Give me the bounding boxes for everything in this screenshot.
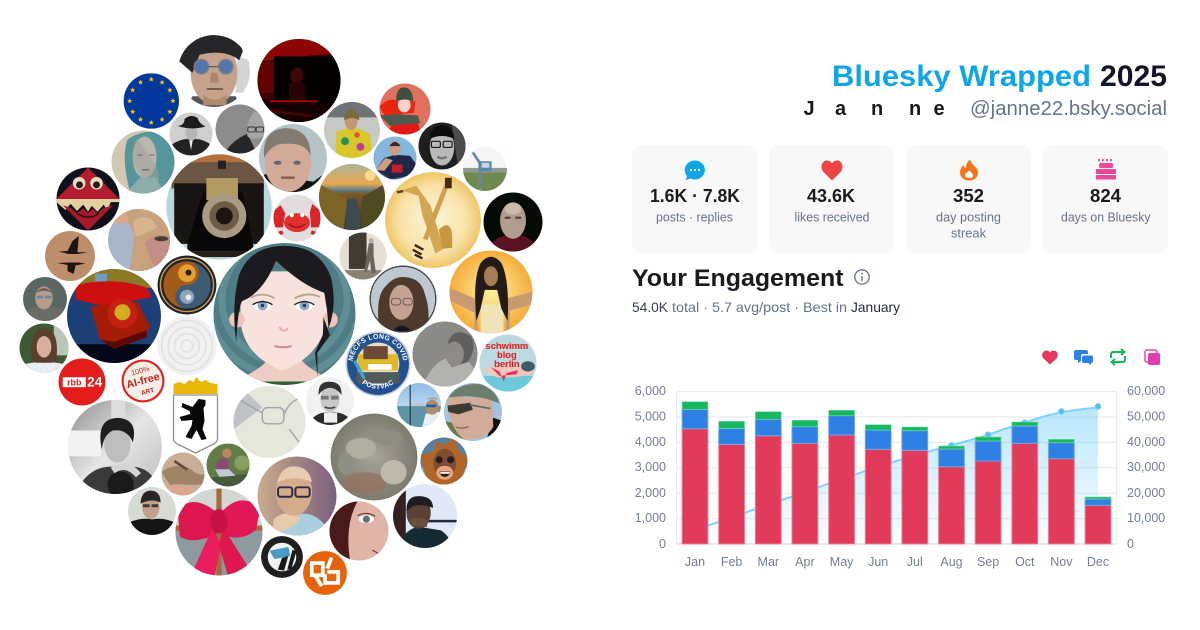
- avatar: Berlin coat of arms: [174, 377, 218, 453]
- avatar: older man with grey hair: [259, 124, 327, 192]
- avatar: bald man with glasses in pastel light: [258, 456, 336, 536]
- avatar: bald man in dark room: [484, 192, 542, 252]
- left axis labels: 5,000: [635, 410, 666, 424]
- avatar: man in blue shirt with folded hands: [374, 136, 416, 180]
- engagement summary: 54.0K: [632, 299, 669, 315]
- avatar: mailbox in landscape: [463, 147, 507, 191]
- icon: comment bubble: [685, 160, 705, 180]
- avatar: ME/CFS Long Covid Postvac badge: POSTVAC: [362, 380, 394, 389]
- avatar: man with glasses, black and white sketch: [306, 377, 354, 425]
- left axis labels: 0: [659, 537, 666, 551]
- stat card: likes received: 43.6K: [807, 186, 855, 206]
- icon: info: [855, 270, 869, 284]
- month labels: Feb: [721, 555, 742, 569]
- avatar: woman with brown hair: [20, 324, 68, 372]
- stat card: days on Bluesky: days on Bluesky: [1061, 210, 1151, 224]
- stat card: posts and replies: [632, 145, 757, 253]
- avatar: schwimm blog berlin: berlin: [494, 358, 520, 369]
- icon: legend reposts: [1111, 349, 1125, 365]
- avatar: red crab plush: [274, 194, 320, 242]
- title: Bluesky Wrapped: [832, 60, 1091, 93]
- stat card: posts and replies: 1.6K · 7.8K: [650, 186, 740, 206]
- avatar: rbb24 logo: [58, 358, 106, 406]
- engagement summary: January: [851, 299, 900, 315]
- avatar: sepia door photograph: [340, 232, 386, 280]
- right axis labels: 30,000: [1127, 460, 1165, 474]
- cumulative line: [695, 404, 1101, 530]
- month labels: May: [830, 555, 854, 569]
- avatar: cranes silhouette: [45, 231, 95, 281]
- avatar: 100% AI-free art badge: 100%: [130, 364, 151, 377]
- avatar: man in car: [23, 277, 67, 321]
- avatar: orange logo: [303, 551, 347, 595]
- avatar: blonde woman at sea: [108, 209, 170, 271]
- stacked bars: [682, 402, 1111, 544]
- right axis labels: 60,000: [1127, 384, 1165, 398]
- right axis labels: 20,000: [1127, 486, 1165, 500]
- month labels: Dec: [1087, 555, 1109, 569]
- avatar: sunset over path: [319, 164, 385, 230]
- stat card: posts and replies: posts · replies: [656, 210, 733, 224]
- icon: legend quotes: [1145, 350, 1160, 365]
- avatar: schwimm blog berlin: [480, 334, 536, 392]
- avatar: EU flag: [124, 73, 179, 129]
- avatar: red monster face: [56, 168, 120, 230]
- avatar: pencil sketch with glasses: [234, 386, 306, 458]
- avatar: rbb24 logo: 24: [87, 375, 103, 390]
- avatar: 100% AI-free art badge: [122, 360, 164, 402]
- left axis labels: [635, 384, 666, 551]
- avatar: dark red room: [258, 39, 340, 122]
- right axis labels: 50,000: [1127, 410, 1165, 424]
- avatar: man with black hat: [170, 112, 212, 156]
- avatar: man with sunglasses and cap: [444, 383, 502, 441]
- avatar: man with beret and blue glasses: [178, 35, 250, 107]
- month labels: Apr: [795, 555, 815, 569]
- avatar: person in colourful jacket: [324, 102, 380, 158]
- right axis labels: 40,000: [1127, 435, 1165, 449]
- avatar: yin yang dragon: [158, 256, 216, 314]
- icon: flame: [960, 160, 978, 180]
- avatar: woman in golden dress: [450, 250, 532, 334]
- icon: heart: [822, 160, 842, 180]
- month labels: Jan: [685, 555, 705, 569]
- month labels: Sep: [977, 555, 999, 569]
- avatar: grey profile of man: [412, 322, 478, 386]
- avatar: rbb24 logo: rbb: [67, 377, 82, 387]
- avatar: blonde child: [162, 452, 204, 496]
- avatar: woman's eye close-up: [330, 502, 388, 560]
- icon: birthday cake: [1096, 159, 1116, 180]
- left axis labels: 1,000: [635, 511, 666, 525]
- month labels: Nov: [1050, 555, 1073, 569]
- avatar: man in black and white with glasses: [418, 122, 466, 170]
- heading: Your Engagement: Your Engagement: [632, 265, 844, 292]
- icon: legend replies: [1074, 350, 1093, 365]
- chart legend: [1042, 349, 1160, 365]
- avatar: main profile illustration: [214, 243, 356, 385]
- stat card: likes received: [769, 145, 894, 253]
- stat card: posting streak: day posting: [936, 210, 1001, 224]
- month labels: Jul: [907, 555, 923, 569]
- cumulative area: [695, 408, 1098, 544]
- month labels: Oct: [1015, 555, 1035, 569]
- avatar: teal woman illustration: [112, 130, 174, 194]
- chart: monthly engagement: [635, 384, 1165, 569]
- avatar: speckled stone: [330, 414, 418, 500]
- avatar: white textured pillow: [158, 316, 216, 376]
- avatar: grey with glasses: [216, 104, 264, 154]
- avatar: woman with curly hair: [370, 266, 436, 332]
- avatar: woman in black and white with camera: [68, 400, 162, 498]
- left axis labels: 6,000: [635, 384, 666, 398]
- icon: legend heart: [1042, 350, 1058, 364]
- stat card: posting streak: 352: [953, 186, 984, 206]
- avatar: schwimm blog berlin: blog: [497, 349, 517, 360]
- month labels: [685, 555, 1109, 569]
- avatar: man at harbour with skyline: [397, 383, 441, 427]
- avatar: 100% AI-free art badge: ART: [140, 387, 155, 397]
- avatar: schwimm blog berlin: schwimm: [485, 340, 528, 351]
- avatar: camera: [166, 154, 272, 260]
- title: 2025: [1100, 60, 1167, 93]
- avatar cluster: [20, 35, 542, 595]
- stat card: posting streak: [906, 145, 1031, 253]
- right axis labels: 10,000: [1127, 511, 1165, 525]
- avatar: antifa round logo: [261, 536, 303, 578]
- avatar: red-haired manga girl: [380, 84, 430, 134]
- left axis labels: 3,000: [635, 460, 666, 474]
- avatar: ME/CFS Long Covid Postvac badge: [346, 332, 410, 396]
- month labels: Aug: [940, 555, 963, 569]
- stat card: posting streak: streak: [951, 226, 987, 240]
- handle: @janne22.bsky.social: [970, 98, 1167, 120]
- stat card: days on Bluesky: [1043, 145, 1168, 253]
- avatar: woman gardening: [206, 444, 250, 486]
- right axis labels: [1127, 384, 1165, 551]
- avatar: man with hand on chin: [393, 484, 457, 548]
- stat card: likes received: likes received: [794, 210, 870, 224]
- avatar: man with cap: [128, 487, 176, 535]
- left axis labels: 4,000: [635, 435, 666, 449]
- stat card: days on Bluesky: 824: [1090, 186, 1121, 206]
- avatar: saxophone and bass guitar: [385, 172, 481, 268]
- month labels: Jun: [868, 555, 888, 569]
- month labels: Mar: [758, 555, 779, 569]
- avatar: ME/CFS Long Covid Postvac badge: MECFS LONG COVID: [348, 334, 408, 361]
- avatar: 100% AI-free art badge: AI-free: [125, 371, 161, 391]
- engagement summary: [632, 299, 900, 315]
- avatar: red rotary telephone: [67, 269, 161, 363]
- display name: Janne: [804, 98, 945, 120]
- right axis labels: 0: [1127, 537, 1134, 551]
- avatar: orangutan baby: [420, 438, 468, 484]
- engagement summary: total · 5.7 avg/post · Best in: [672, 299, 847, 315]
- left axis labels: 2,000: [635, 486, 666, 500]
- avatar: big red ribbon bow: [176, 488, 262, 576]
